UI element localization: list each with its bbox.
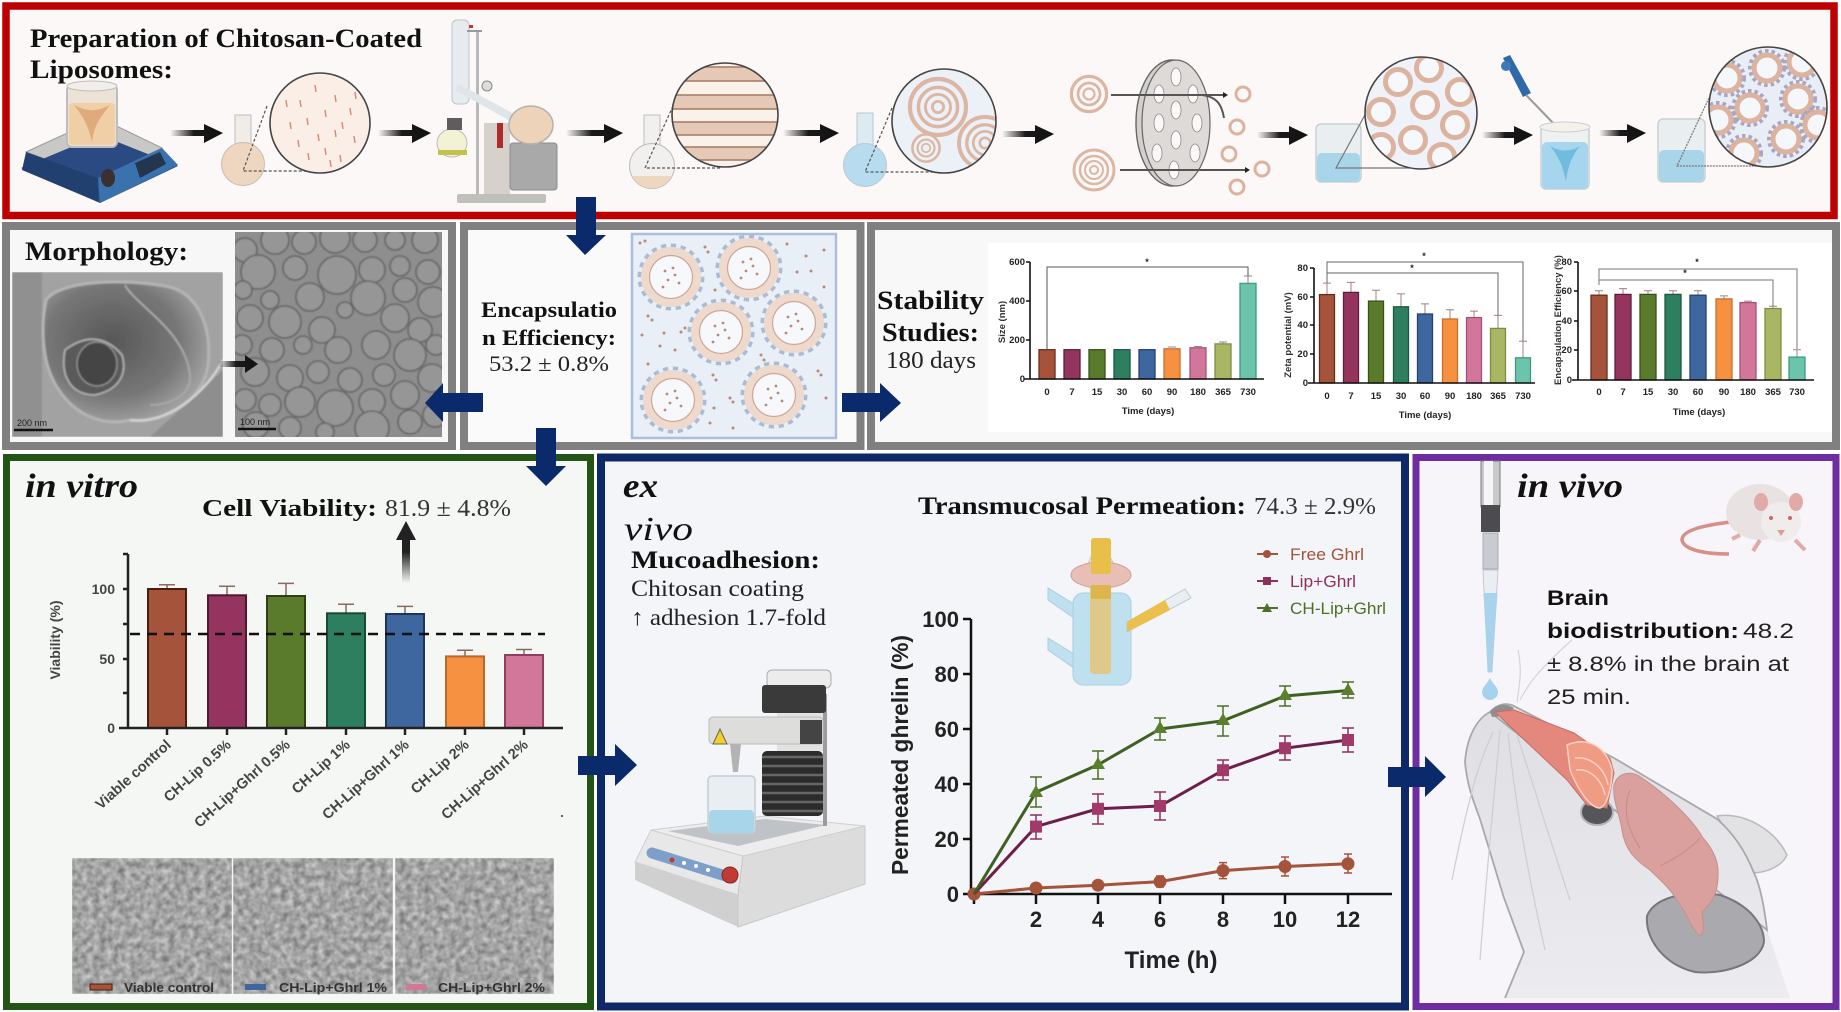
brain biodistribution text: 48.2 [1743,620,1794,643]
arrow: to stability [842,383,901,422]
bar chart: encapsulation efficiency: 30 [1668,387,1678,398]
bar chart: size: 15 [1092,387,1103,398]
cryo-EM image: uniform liposomes [235,232,442,437]
bar chart: encapsulation efficiency: 40 [1561,316,1572,327]
bar chart: viability: CH-Lip 2% [408,737,473,797]
encapsulation efficiency text: Encapsulatio [481,297,617,322]
bar chart: zeta potential: 0 [1324,391,1330,402]
bar chart: zeta potential: 40 [1297,320,1308,331]
bar chart: encapsulation efficiency: 15 [1643,387,1654,398]
mucoadhesion text: ↑ adhesion 1.7-fold [631,605,827,630]
arrow 4 [783,124,839,143]
micrograph legend: CH-Lip+Ghrl 1% [279,981,387,995]
bar chart: encapsulation efficiency: 60 [1693,387,1703,398]
icon: extrusion membrane [1111,60,1250,186]
micrograph: CH-Lip+Ghrl 1% [233,858,393,994]
arrow 1 [170,124,223,143]
bar chart: zeta potential: 730 [1515,391,1531,402]
diagram: coated liposomes with encapsulated peptide [632,234,836,438]
ear canal grey area [1647,893,1764,973]
bar chart: size: 365 [1215,387,1232,398]
dark eye [1581,799,1613,825]
bar chart: size: 0 [1044,387,1050,398]
line chart: permeated ghrelin: 10 [1273,907,1297,932]
arrow: preparation to encapsulation [566,197,606,255]
bar chart: viability: CH-Lip 1% [289,737,354,797]
bar chart: size: 60 [1142,387,1152,398]
bar chart: zeta potential: 365 [1490,391,1507,402]
chart legend: Free Ghrl [1290,545,1364,564]
arrow 2 [378,124,431,143]
heading: morphology: Morphology: [25,237,188,266]
arrow: to morphology [425,383,483,422]
bar chart: zeta potential: 90 [1445,391,1455,402]
icon: beaker with chitosan stirring [1540,122,1590,189]
icon: micropipette [1501,55,1555,125]
bar chart: viability: CH-Lip 0.5% [161,737,235,806]
series: liposome ghrelin [974,728,1354,894]
icon: rotary evaporator [437,20,557,203]
zoom circle: multilamellar vesicles [892,69,1011,173]
bar chart: zeta potential: 0 [1303,378,1308,389]
encapsulation efficiency text: n Efficiency: [482,325,616,350]
micrograph: CH-Lip+Ghrl 2% [395,858,554,994]
stability heading [877,286,984,374]
bar chart: viability: CH-Lip+Ghrl 1% [320,737,413,823]
bar chart: encapsulation efficiency: 60 [1561,286,1572,297]
brain [1614,773,1718,936]
bar chart: viability: CH-Lip+Ghrl 2% [439,737,532,823]
series: free ghrelin [968,854,1354,900]
chart legend: Lip+Ghrl [1290,572,1356,591]
panel: in vitro [6,458,590,1006]
arrow 6 [1257,126,1308,145]
bar chart: viability [47,554,563,831]
bar chart: size: Time (days) [1122,406,1174,417]
icon: texture analyser [635,670,865,927]
icon: flask 3 [844,108,945,186]
icon: pipette with drop [1481,461,1500,700]
title second line: Liposomes: [30,55,173,84]
chart legend [1257,545,1386,618]
mucoadhesion text: Mucoadhesion: [631,547,820,574]
bar chart: encapsulation efficiency: 7 [1620,387,1626,398]
line chart: permeated ghrelin: 12 [1336,907,1360,932]
panel: stability studies [871,226,1836,446]
bar chart: zeta potential: Time (days) [1399,410,1451,421]
arrow: ex vivo to in vivo [1388,756,1446,797]
transmucosal permeation result: 74.3 ± 2.9% [1254,494,1376,520]
micrograph legend: CH-Lip+Ghrl 2% [438,981,545,995]
micrograph legend: Viable control [124,981,214,995]
icon: flask 2 [630,106,720,188]
zoom circle: lipid bilayer sheets [670,63,782,167]
line chart: permeated ghrelin: 0 [947,882,959,907]
arrow up to viability value [396,521,416,583]
arrow 8 [1599,124,1646,143]
bar chart: encapsulation efficiency [1553,255,1814,418]
icon: Franz diffusion cell [1048,538,1191,685]
micrograph legend [90,981,545,995]
heading: ex vivo [623,468,693,548]
cryo-EM image: large multilamellar vesicle [12,272,223,437]
bar chart: size: 90 [1167,387,1177,398]
arrow 7 [1482,126,1533,145]
arrow: to in vitro [526,428,566,486]
heading: in vitro: in vitro [25,468,138,505]
line chart: permeated ghrelin: 4 [1092,907,1105,932]
line chart: permeated ghrelin: 100 [922,607,959,632]
bar chart: size [997,257,1264,417]
mucoadhesion text [631,547,827,630]
heading: ex vivo: vivo [624,511,693,548]
icon: large onion vesicle top [1071,76,1107,112]
cell viability result: 81.9 ± 4.8% [385,496,511,522]
bar chart: zeta potential: 60 [1297,292,1308,303]
bar chart: encapsulation efficiency: 180 [1740,387,1756,398]
bar chart: encapsulation efficiency: 0 [1596,387,1602,398]
panel: in vivo [1416,458,1836,1006]
bar chart: zeta potential: * [1422,251,1426,261]
bar chart: viability: Viability (%) [47,600,63,680]
zoom circle: lipid film molecules [270,73,370,173]
stability heading: Studies: [882,318,979,347]
stability heading: 180 days [886,348,976,374]
bar chart: zeta potential: Zeta potential (mV) [1283,292,1294,378]
series: chitosan-coated ghrelin [974,682,1355,894]
bar chart: viability: 100 [92,581,115,597]
arrow between cryo images [218,355,258,373]
icon: beaker with liposomes [1316,102,1410,182]
arrow 5 [1002,125,1054,144]
encapsulation efficiency text [481,297,617,376]
stability heading: Stability [877,286,984,315]
bar chart: zeta potential: 180 [1466,391,1482,402]
line chart: permeated ghrelin [887,545,1392,974]
small unilamellar vesicles after extrusion [1222,87,1269,194]
arrow 3 [566,124,623,143]
icon: large onion vesicle bottom [1074,150,1114,190]
line chart: permeated ghrelin: 6 [1154,907,1166,932]
cell viability result [202,496,511,522]
bar chart: encapsulation efficiency: 0 [1567,375,1572,386]
bar chart: size: 600 [1009,257,1025,268]
line chart: permeated ghrelin: 2 [1030,907,1042,932]
brain biodistribution text [1547,587,1794,709]
bar chart: zeta potential: 30 [1396,391,1406,402]
bar chart: zeta potential: 7 [1348,391,1354,402]
panel: encapsulation efficiency [464,226,860,446]
bar chart: encapsulation efficiency: * [1683,268,1687,278]
line chart: permeated ghrelin: 40 [935,772,959,797]
heading: ex vivo: ex [623,468,658,505]
bar chart: size: 0 [1020,374,1025,385]
line chart: permeated ghrelin: Time (h) [1125,947,1217,974]
bar chart: zeta potential: * [1410,263,1414,273]
bar chart: viability: 0 [107,720,115,736]
bar chart: viability: Viable control [93,737,175,813]
bar chart: encapsulation efficiency: 90 [1719,387,1729,398]
line chart: permeated ghrelin: 20 [935,827,959,852]
bar chart: encapsulation efficiency: 80 [1561,257,1572,268]
bar chart: size: 7 [1069,387,1075,398]
line chart: permeated ghrelin: 8 [1217,907,1229,932]
panel: ex vivo [601,458,1405,1006]
heading: in vivo: in vivo [1517,468,1623,505]
bar chart: zeta potential: 60 [1420,391,1430,402]
icon: flask 1 [222,106,310,186]
brain biodistribution text: Brain [1547,587,1609,610]
bar chart: size: Size (nm) [997,301,1008,343]
nasal cavity and olfactory bulb [1495,710,1614,808]
zoom circle: chitosan-coated liposomes [1708,46,1828,168]
bar chart: encapsulation efficiency: 365 [1765,387,1782,398]
bar chart: viability: CH-Lip+Ghrl 0.5% [192,737,294,831]
transmucosal permeation result: Transmucosal Permeation: [918,493,1246,520]
panel: morphology [6,223,452,446]
bar chart: size: 200 [1009,335,1025,346]
micrograph: viable control [72,858,232,994]
panel: preparation of chitosan-coated liposomes [6,6,1835,216]
bar chart: viability: 50 [99,651,115,667]
line chart: permeated ghrelin: 60 [935,717,959,742]
bar chart: encapsulation efficiency: * [1695,257,1699,267]
bar chart: size: 730 [1240,387,1256,398]
bar chart: zeta potential: 20 [1297,349,1308,360]
bar chart: size: 180 [1190,387,1206,398]
bar chart: zeta potential: 80 [1297,263,1308,274]
illustration: mouse head with nasal cavity and brain [1452,640,1790,998]
zoom circle: liposomes [1365,56,1477,170]
icon: magnetic stirrer with beaker [21,81,178,203]
icon: beaker with coated liposomes [1658,98,1770,182]
cryo-EM image: large multilamellar vesicle: 200 nm [17,418,47,428]
brain biodistribution text: biodistribution: [1547,620,1739,643]
bar chart: encapsulation efficiency: 730 [1789,387,1805,398]
chart legend: CH-Lip+Ghrl [1290,599,1386,618]
white chart background [988,243,1832,432]
bar chart: encapsulation efficiency: 20 [1561,345,1572,356]
bar chart: encapsulation efficiency: Time (days) [1673,407,1725,418]
bar chart: encapsulation efficiency: Encapsulation Efficiency (%) [1553,255,1564,385]
bar chart: zeta potential [1283,251,1535,421]
brain biodistribution text: ± 8.8% in the brain at [1547,653,1789,676]
title: Preparation of Chitosan-Coated [30,24,423,53]
line chart: permeated ghrelin: Permeated ghrelin (%) [887,635,913,875]
arrow: in vitro to ex vivo [578,744,637,786]
bar chart: zeta potential: 15 [1371,391,1382,402]
mucoadhesion text: Chitosan coating [631,576,805,601]
brain biodistribution text: 25 min. [1547,686,1631,709]
line chart: permeated ghrelin: 80 [935,662,959,687]
bar chart: size: * [1145,257,1149,267]
transmucosal permeation result [918,493,1376,520]
bar chart: size: 400 [1009,296,1025,307]
cell viability result: Cell Viability: [202,496,377,522]
cryo-EM image: uniform liposomes: 100 nm [240,417,270,427]
icon: rat [1682,484,1805,554]
bar chart: size: 30 [1117,387,1127,398]
encapsulation efficiency text: 53.2 ± 0.8% [489,351,609,376]
